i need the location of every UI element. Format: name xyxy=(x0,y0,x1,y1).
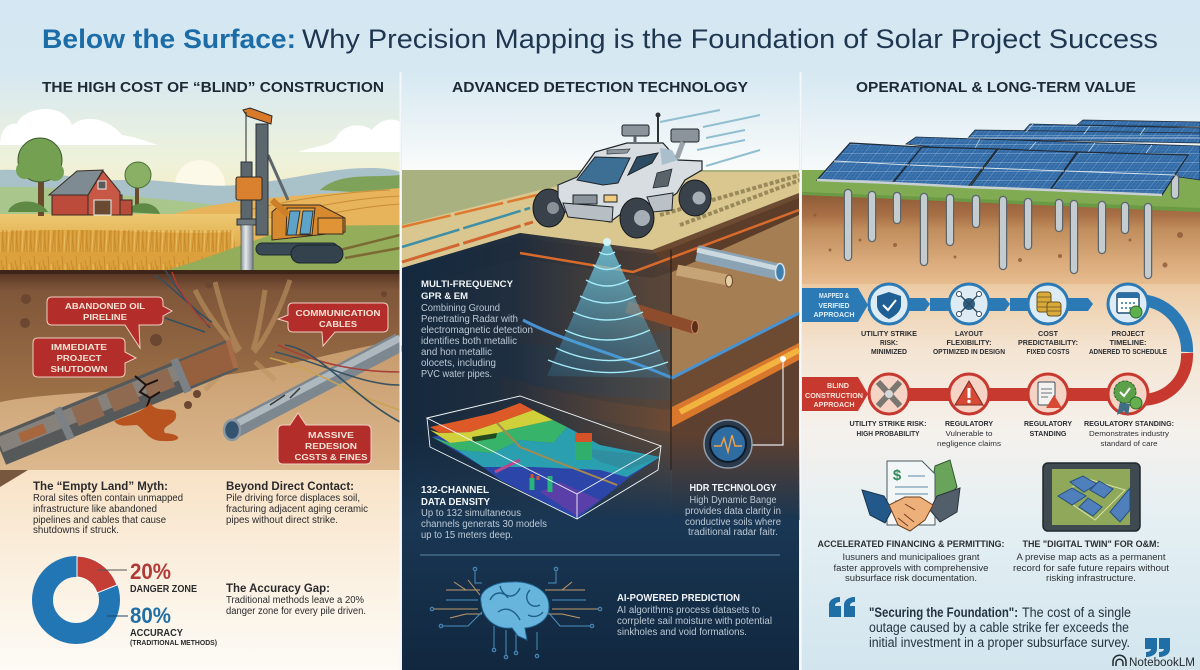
callout: massive redesign costs and fines: CGSTS & FINES xyxy=(294,452,368,462)
farm landscape scene xyxy=(0,72,400,373)
callout: immediate project shutdown xyxy=(33,338,136,377)
text: multi-frequency GPR and EM: and hon metallic xyxy=(421,347,492,358)
callout: abandoned oil pipeline: ABANDONED OIL xyxy=(65,301,145,311)
stage labels: Vulnerable to xyxy=(946,429,992,438)
stage labels: REGULATORY xyxy=(945,419,993,428)
support posts xyxy=(848,178,1175,275)
donut chart: 20% danger zone, 80% accuracy: ACCURACY xyxy=(130,628,183,639)
callout: abandoned oil pipeline: PIRELINE xyxy=(83,312,127,322)
mapped and verified row: APPROACH xyxy=(814,310,854,319)
donut chart: 20% danger zone, 80% accuracy: 20% xyxy=(130,559,171,584)
subsurface soil layers xyxy=(402,193,800,520)
cracked grey pipe xyxy=(224,338,400,440)
text: multi-frequency GPR and EM: olocets, including xyxy=(421,358,496,369)
text: digital twin for O&M: THE "DIGITAL TWIN" FOR O&M: xyxy=(1022,539,1160,550)
icon: shield xyxy=(869,284,909,324)
mapped and verified row: VERIFIED xyxy=(818,301,850,310)
NotebookLM logo: NotebookLM xyxy=(1129,657,1195,669)
donut chart: 20% danger zone, 80% accuracy xyxy=(42,556,217,647)
stage labels: ADNERED TO SCHEDULE xyxy=(1089,347,1167,356)
donut chart: 20% danger zone, 80% accuracy: 80% xyxy=(130,603,171,628)
callout: massive redesign costs and fines: REDESION xyxy=(305,441,357,451)
icon: AI brain with circuit lines xyxy=(430,567,602,659)
sky and ground plane xyxy=(402,72,800,280)
text: empty land myth: infrastructure like abandoned xyxy=(33,504,157,515)
text: multi-frequency GPR and EM: identifies both metallic xyxy=(421,336,517,347)
NotebookLM logo xyxy=(1113,655,1195,669)
survey rover xyxy=(533,112,711,238)
stage labels: PROJECT xyxy=(1112,329,1145,338)
text: multi-frequency GPR and EM: Penetrating Radar with xyxy=(421,314,518,325)
front solar panels xyxy=(817,143,1188,195)
3D data density model xyxy=(427,396,661,519)
text: accuracy gap: Traditional methods leave a 20% xyxy=(226,595,364,606)
text: 132-channel data density: Up to 132 simultaneous xyxy=(421,508,521,519)
panel: operational and long-term value xyxy=(802,72,1200,670)
text: AI-powered prediction: sinkholes and void formations. xyxy=(617,627,747,638)
stage labels: LAYOUT xyxy=(955,329,983,338)
text: multi-frequency GPR and EM: GPR & EM xyxy=(421,291,468,302)
callout: communication cables: CABLES xyxy=(319,319,357,329)
stage labels: COST xyxy=(1038,329,1058,338)
icon: digital twin tablet xyxy=(1043,463,1140,531)
icon: warning triangle xyxy=(949,374,989,414)
icon: network gear xyxy=(949,284,989,324)
mapped and verified row xyxy=(802,284,1187,356)
text: multi-frequency GPR and EM xyxy=(421,279,533,380)
text: HDR technology: conductive soils where xyxy=(685,517,781,528)
callout: massive redesign costs and fines: MASSIVE xyxy=(308,430,354,440)
panel dividers xyxy=(400,72,800,670)
icon: crossed broken pipes xyxy=(869,374,909,414)
stage labels: PREDICTABILITY: xyxy=(1018,338,1078,347)
icon: green approval badge xyxy=(1108,374,1148,416)
stage labels: OPTIMIZED IN DESIGN xyxy=(933,347,1005,356)
callout: communication cables: COMMUNICATION xyxy=(296,308,380,318)
stage labels: FLEXIBILITY: xyxy=(946,338,992,347)
text: beyond direct contact xyxy=(226,479,368,526)
text: HDR technology: traditional radar faitr. xyxy=(688,527,778,538)
text: digital twin for O&M: A previse map acts as a permanent xyxy=(1016,552,1166,563)
lower text area background xyxy=(0,470,400,670)
rusty oil pipeline xyxy=(0,340,236,450)
icon: clipboard warning xyxy=(1028,374,1068,414)
stage labels: REGULATORY STANDING: xyxy=(1084,419,1174,428)
panel 2 heading: ADVANCED DETECTION TECHNOLOGY xyxy=(452,80,748,96)
rear row separators xyxy=(967,124,1200,153)
panel: advanced detection technology xyxy=(402,72,800,670)
text: accuracy gap: danger zone for every pile driven. xyxy=(226,606,366,617)
text: multi-frequency GPR and EM: PVC water pipes. xyxy=(421,369,492,380)
text: HDR technology: High Dynamic Bange xyxy=(690,495,777,506)
text: HDR technology: HDR TECHNOLOGY xyxy=(690,483,777,494)
donut chart: 20% danger zone, 80% accuracy: (TRADITIONAL METHODS) xyxy=(130,640,217,647)
callout: communication cables xyxy=(278,303,388,346)
quote text: "Securing the Foundation":The cost of a single xyxy=(869,605,1131,620)
barn xyxy=(49,170,132,215)
stage labels: STANDING xyxy=(1030,429,1067,438)
quote text: outage caused by a cable strike fer exceeds the xyxy=(869,620,1129,635)
mapped and verified row: MAPPED & xyxy=(819,291,849,300)
callout: immediate project shutdown: IMMEDIATE xyxy=(51,342,107,352)
pipe corner xyxy=(0,470,28,487)
blind construction row: APPROACH xyxy=(814,400,854,409)
rear solar rows xyxy=(906,120,1200,180)
text: beyond direct contact: fracturing adjacent aging ceramic xyxy=(226,504,368,515)
callout: abandoned oil pipeline xyxy=(47,297,172,348)
stage labels: RISK: xyxy=(880,338,898,347)
text: multi-frequency GPR and EM: MULTI-FREQUENCY xyxy=(421,279,514,290)
text: multi-frequency GPR and EM: electromagnetic detection xyxy=(421,325,533,336)
text: AI-powered prediction: AI-POWERED PREDICTION xyxy=(617,593,740,604)
oil spill xyxy=(114,402,178,441)
lower panel background xyxy=(802,284,1200,670)
text: 132-channel data density xyxy=(421,485,547,541)
text: empty land myth: Roral sites often contain unmapped xyxy=(33,493,183,504)
exposed cables xyxy=(270,345,400,422)
text: AI-powered prediction xyxy=(617,593,772,638)
icon: handshake, contract and money xyxy=(862,460,960,531)
stage labels xyxy=(850,419,1174,448)
text: accelerated financing and permitting: Iusuners and municipalioes grant xyxy=(842,552,980,563)
quote: securing the foundation xyxy=(829,597,1131,650)
trees xyxy=(8,138,160,216)
text: empty land myth: pipelines and cables that cause xyxy=(33,515,166,526)
radar cone xyxy=(547,238,672,378)
text: accelerated financing and permitting xyxy=(818,539,1004,584)
text: beyond direct contact: Pile driving force displaces soil, xyxy=(226,493,360,504)
text: empty land myth: The “Empty Land” Myth: xyxy=(33,479,168,493)
stage labels: Demonstrates industry xyxy=(1089,429,1169,438)
stage labels: REGULATORY xyxy=(1024,419,1072,428)
closing quote mark xyxy=(1145,638,1170,657)
stage labels: standard of care xyxy=(1100,439,1158,448)
buried pipes xyxy=(627,250,784,334)
blind construction row xyxy=(802,353,1187,448)
blind construction row: BLIND xyxy=(827,381,849,390)
text: accuracy gap: The Accuracy Gap: xyxy=(226,581,330,595)
underground soil cross-section xyxy=(0,270,400,470)
callout: immediate project shutdown: PROJECT xyxy=(56,353,102,363)
navy background xyxy=(402,270,799,670)
text: 132-channel data density: up to 15 meters deep. xyxy=(421,530,513,541)
text: 132-channel data density: DATA DENSITY xyxy=(421,497,490,508)
quote text xyxy=(869,605,1131,650)
text: accelerated financing and permitting: faster approvels with comprehensive xyxy=(834,563,988,574)
icon: handshake, contract and money: $ xyxy=(893,467,902,484)
panel 3 heading: OPERATIONAL & LONG-TERM VALUE xyxy=(856,80,1136,96)
text: digital twin for O&M: record for safe future repairs without xyxy=(1013,563,1169,574)
pile driver xyxy=(236,108,272,373)
stage labels: HIGH PROBABILITY xyxy=(856,429,920,438)
stage labels: MINIMIZED xyxy=(871,347,908,356)
solar farm scene xyxy=(802,72,1200,284)
text: digital twin for O&M xyxy=(1013,539,1169,584)
text: accelerated financing and permitting: ACCELERATED FINANCING & PERMITTING: xyxy=(818,539,1004,550)
panel: the high cost of blind construction xyxy=(0,72,400,670)
quote text: initial investment in a proper subsurface survey. xyxy=(869,635,1130,650)
stage labels: UTILITY STRIKE xyxy=(861,329,917,338)
text: 132-channel data density: 132-CHANNEL xyxy=(421,485,489,496)
icon: coins xyxy=(1028,284,1068,324)
callout: massive redesign costs and fines xyxy=(278,413,371,464)
panel 1 heading: THE HIGH COST OF “BLIND” CONSTRUCTION xyxy=(42,80,384,96)
text: accuracy gap xyxy=(226,581,366,617)
stage labels: TIMELINE: xyxy=(1110,338,1146,347)
text: HDR technology xyxy=(685,483,781,538)
text: beyond direct contact: pipes without direct strike. xyxy=(226,515,338,526)
HDR technology icon xyxy=(704,356,786,468)
stage labels: negligence claims xyxy=(937,439,1001,448)
text: HDR technology: provides data clarity in xyxy=(685,506,781,517)
text: multi-frequency GPR and EM: Combining Ground xyxy=(421,303,500,314)
text: empty land myth: shutdowns if struck. xyxy=(33,525,119,536)
divider xyxy=(420,554,780,556)
text: AI-powered prediction: corrplete sail moisture with potential xyxy=(617,616,772,627)
stage labels xyxy=(861,329,1167,356)
blind construction row: CONSTRUCTION xyxy=(805,391,863,400)
excavator xyxy=(256,155,345,263)
title: Below the Surface: xyxy=(42,24,296,54)
icon: calendar xyxy=(1108,284,1148,324)
stage labels: FIXED COSTS xyxy=(1026,347,1070,356)
text: accelerated financing and permitting: subsurface risk documentation. xyxy=(845,573,977,584)
text: digital twin for O&M: risking infrastructure. xyxy=(1046,573,1136,584)
title: Why Precision Mapping is the Foundation of Solar Project Success xyxy=(302,24,1158,54)
text: beyond direct contact: Beyond Direct Contact: xyxy=(226,479,354,493)
callout: immediate project shutdown: SHUTDOWN xyxy=(50,364,108,374)
text: 132-channel data density: channels generats 30 models xyxy=(421,519,547,530)
text: AI-powered prediction: AI algorithms process datasets to xyxy=(617,605,760,616)
text: empty land myth xyxy=(33,479,183,536)
donut chart: 20% danger zone, 80% accuracy: DANGER ZONE xyxy=(130,584,197,595)
opening quote mark xyxy=(829,597,855,617)
stage labels: UTILITY STRIKE RISK: xyxy=(850,419,926,428)
